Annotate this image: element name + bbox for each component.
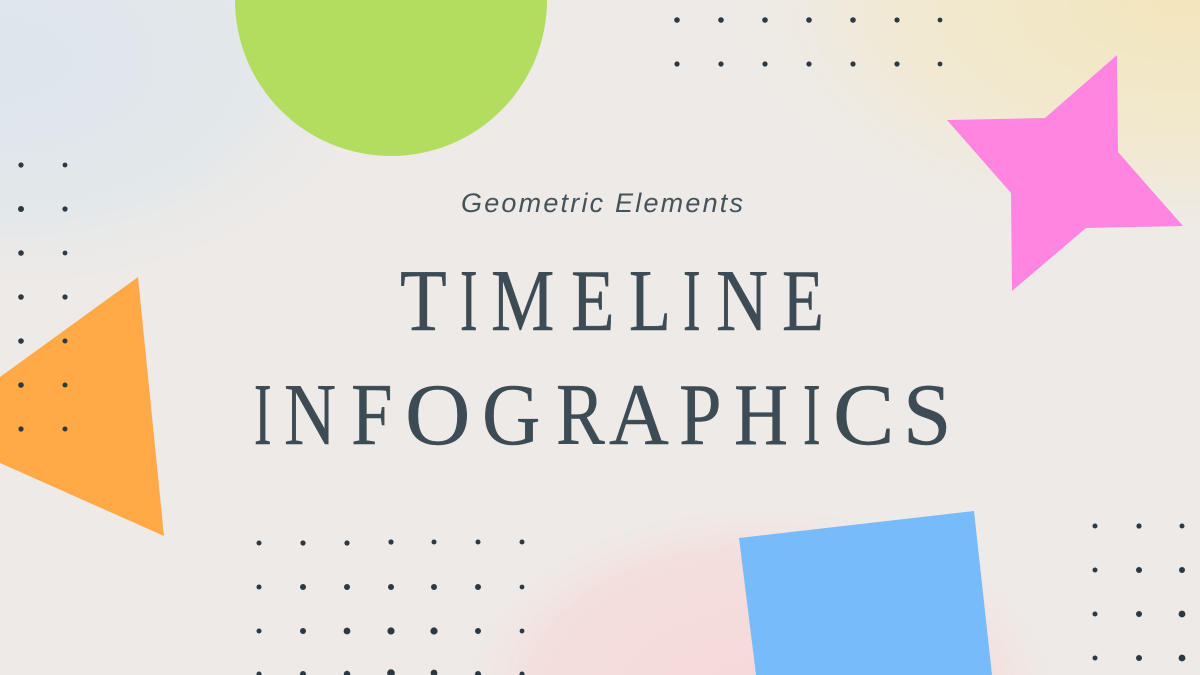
title line 2: H [734, 367, 788, 464]
dot grid: top [674, 17, 942, 67]
title line 1: L [629, 253, 671, 350]
title line 1: E [571, 253, 614, 350]
subtitle: Geometric Elements [461, 188, 743, 218]
dot grid: bottom [256, 539, 524, 675]
title line 1: E [782, 253, 824, 350]
title line 2: O [405, 367, 470, 464]
title line 2: S [903, 367, 952, 464]
title line 1: I [460, 253, 477, 350]
title line 2: I [803, 367, 821, 464]
title line 1 [400, 253, 824, 350]
title line 2: P [679, 367, 721, 464]
dot grid: right [1092, 523, 1185, 661]
title line 2: I [254, 367, 272, 464]
title line 2: G [482, 367, 541, 464]
title line 2: R [556, 367, 604, 464]
pink star [947, 55, 1183, 291]
blue square [739, 511, 992, 675]
green circle [235, 0, 547, 156]
title line 2: A [609, 367, 668, 464]
title line 2: N [284, 367, 336, 464]
title line 1: T [400, 253, 447, 350]
title line 2 [254, 367, 952, 464]
title [254, 253, 952, 464]
title line 2: F [351, 367, 392, 464]
dot grid: left [18, 162, 68, 432]
title line 1: M [491, 253, 554, 350]
title line 1: I [683, 253, 701, 350]
orange triangle [0, 277, 164, 536]
title line 1: N [716, 253, 768, 350]
title line 2: C [833, 367, 895, 464]
